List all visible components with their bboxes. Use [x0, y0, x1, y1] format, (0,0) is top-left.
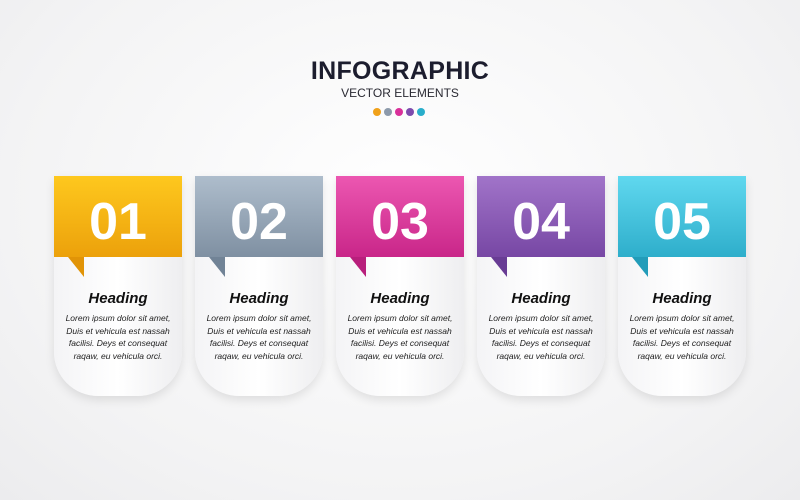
- pointer tail: [68, 257, 84, 277]
- body text: Duis et vehicula est nassah: [489, 326, 593, 336]
- body text: Lorem ipsum dolor sit amet,: [66, 313, 170, 323]
- card 04: [477, 176, 605, 396]
- card 01: [54, 176, 182, 396]
- body text: raqaw, eu vehicula orci.: [356, 351, 444, 361]
- body text: Lorem ipsum dolor sit amet,: [207, 313, 311, 323]
- body text: Duis et vehicula est nassah: [207, 326, 311, 336]
- pointer tail: [632, 257, 648, 277]
- number header 03: [336, 176, 464, 257]
- body text: facilisi. Deys et consequat: [69, 338, 167, 348]
- heading: Heading: [652, 290, 712, 307]
- heading: Heading: [229, 290, 289, 307]
- pointer tail: [350, 257, 366, 277]
- card 03: [336, 176, 464, 396]
- number header 04: [477, 176, 605, 257]
- body text: [630, 313, 734, 361]
- body text: Duis et vehicula est nassah: [348, 326, 452, 336]
- body text: [488, 313, 593, 361]
- body text: Lorem ipsum dolor sit amet,: [630, 313, 734, 323]
- number header 01: 01: [89, 193, 147, 251]
- body text: raqaw, eu vehicula orci.: [215, 351, 303, 361]
- body text: facilisi. Deys et consequat: [633, 338, 731, 348]
- number header 04: 04: [512, 193, 570, 251]
- body text: facilisi. Deys et consequat: [351, 338, 449, 348]
- number header 05: 05: [653, 193, 711, 251]
- body text: facilisi. Deys et consequat: [210, 338, 308, 348]
- body text: raqaw, eu vehicula orci.: [497, 351, 585, 361]
- subtitle: VECTOR ELEMENTS: [341, 86, 459, 100]
- title: INFOGRAPHIC: [311, 57, 489, 85]
- body text: raqaw, eu vehicula orci.: [74, 351, 162, 361]
- color dots: [373, 108, 425, 116]
- body text: [348, 313, 452, 361]
- body text: facilisi. Deys et consequat: [492, 338, 590, 348]
- body text: Lorem ipsum dolor sit amet,: [489, 313, 593, 323]
- number header 03: 03: [371, 193, 429, 251]
- heading: Heading: [88, 290, 148, 307]
- body text: raqaw, eu vehicula orci.: [638, 351, 726, 361]
- number header 02: [195, 176, 323, 257]
- body text: Duis et vehicula est nassah: [66, 326, 170, 336]
- number header 01: [54, 176, 182, 257]
- card 02: [195, 176, 323, 396]
- body text: [206, 313, 311, 361]
- heading: Heading: [511, 290, 571, 307]
- body text: [66, 313, 170, 361]
- number header 02: 02: [230, 193, 288, 251]
- body text: Duis et vehicula est nassah: [630, 326, 734, 336]
- pointer tail: [491, 257, 507, 277]
- body text: Lorem ipsum dolor sit amet,: [348, 313, 452, 323]
- heading: Heading: [370, 290, 430, 307]
- card 05: [618, 176, 746, 396]
- pointer tail: [209, 257, 225, 277]
- number header 05: [618, 176, 746, 257]
